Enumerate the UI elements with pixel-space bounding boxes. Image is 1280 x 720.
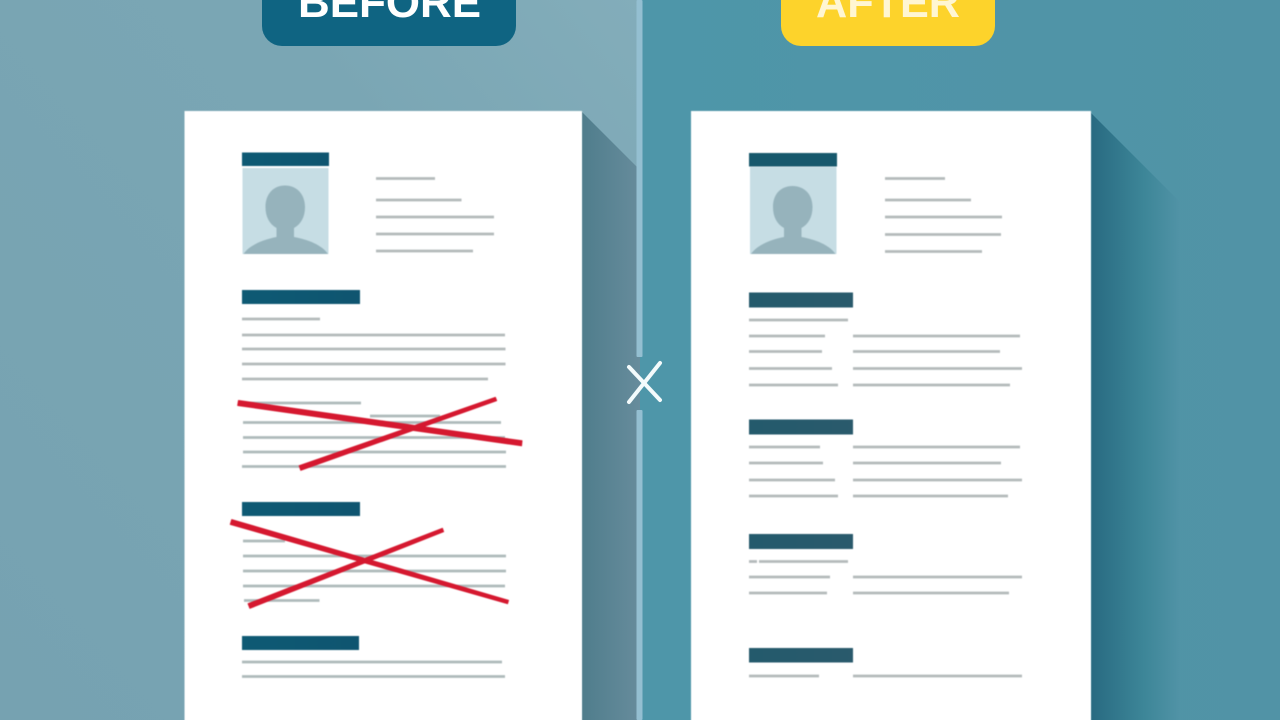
before badge — [262, 0, 516, 46]
after page shadow — [1091, 113, 1180, 720]
before contact lines — [376, 178, 494, 251]
icon: before profile photo — [242, 168, 328, 254]
after section two lines — [749, 447, 1022, 496]
icon: center cross — [629, 363, 660, 402]
before page shadow — [582, 112, 640, 720]
before struck lines one — [242, 403, 506, 466]
red strike one — [238, 397, 522, 470]
left background panel — [0, 0, 640, 720]
after section one heading — [749, 292, 853, 308]
after name bar — [749, 153, 837, 166]
icon: after profile photo — [750, 167, 836, 254]
after section one lines — [749, 320, 1022, 385]
before section one lines — [242, 319, 506, 379]
before section two lines — [243, 541, 506, 600]
red strike two — [230, 520, 509, 608]
after section two heading — [749, 420, 853, 434]
right background panel — [640, 0, 1280, 720]
after badge — [781, 0, 995, 46]
panel: after resume — [691, 111, 1091, 720]
after section three lines — [749, 562, 1022, 593]
before section three heading — [242, 636, 359, 650]
after section three heading — [749, 534, 853, 549]
after section four heading — [749, 648, 853, 662]
before section three lines — [242, 662, 505, 676]
center divider — [636, 0, 642, 720]
before section two heading — [242, 502, 360, 516]
panel: before resume — [184, 111, 582, 720]
before name bar — [242, 152, 329, 166]
after contact lines — [885, 178, 1002, 252]
before section one heading — [242, 290, 360, 304]
after section four lines — [749, 675, 1022, 677]
